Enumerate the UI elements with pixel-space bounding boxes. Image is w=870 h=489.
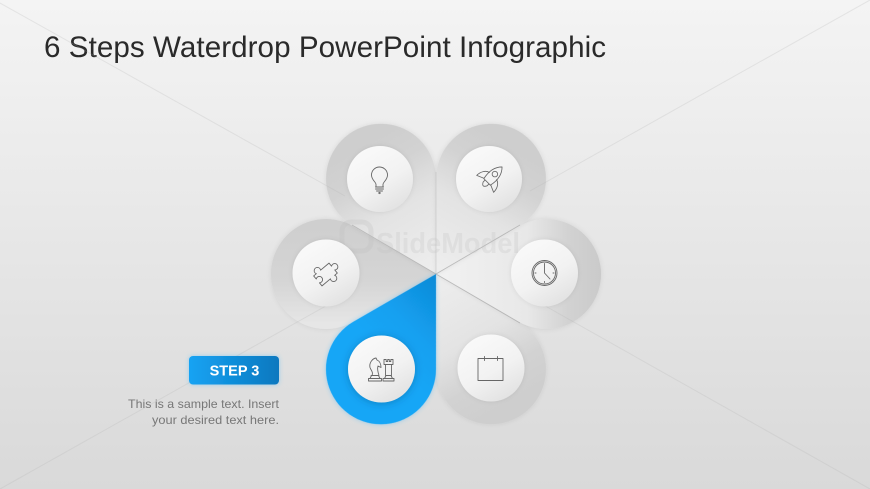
- drop: clock: [436, 219, 601, 329]
- drop: calendar: [388, 246, 566, 444]
- watermark: SlideModel: [376, 228, 520, 260]
- icon: puzzle: [311, 256, 344, 290]
- watermark: [342, 222, 538, 260]
- step 3 button: [189, 356, 279, 384]
- drop edge lines: [352, 172, 520, 323]
- disc: chess: [348, 336, 415, 402]
- icon: rocket: [475, 158, 511, 194]
- icon: clock: [532, 260, 557, 286]
- icon: chess pieces: [368, 358, 394, 381]
- icon: calendar: [478, 356, 503, 380]
- disc: rocket: [456, 146, 522, 212]
- icon: light bulb: [372, 167, 388, 194]
- disc: puzzle: [292, 240, 360, 306]
- step 3 button: STEP 3: [210, 364, 259, 380]
- disc: bulb: [347, 146, 413, 212]
- drop: puzzle: [271, 219, 436, 329]
- step 3 description: your desired text here.: [152, 413, 279, 427]
- step 3 description: This is a sample text. Insert: [128, 397, 280, 411]
- drop: chess highlighted: [306, 246, 484, 444]
- step 3 description: [128, 397, 280, 427]
- disc: clock: [511, 240, 578, 306]
- title: 6 Steps Waterdrop PowerPoint Infographic: [44, 31, 606, 64]
- watermark: .com: [520, 246, 538, 255]
- disc: calendar: [458, 334, 524, 402]
- drop: rocket: [388, 104, 566, 302]
- drop: bulb: [306, 104, 484, 302]
